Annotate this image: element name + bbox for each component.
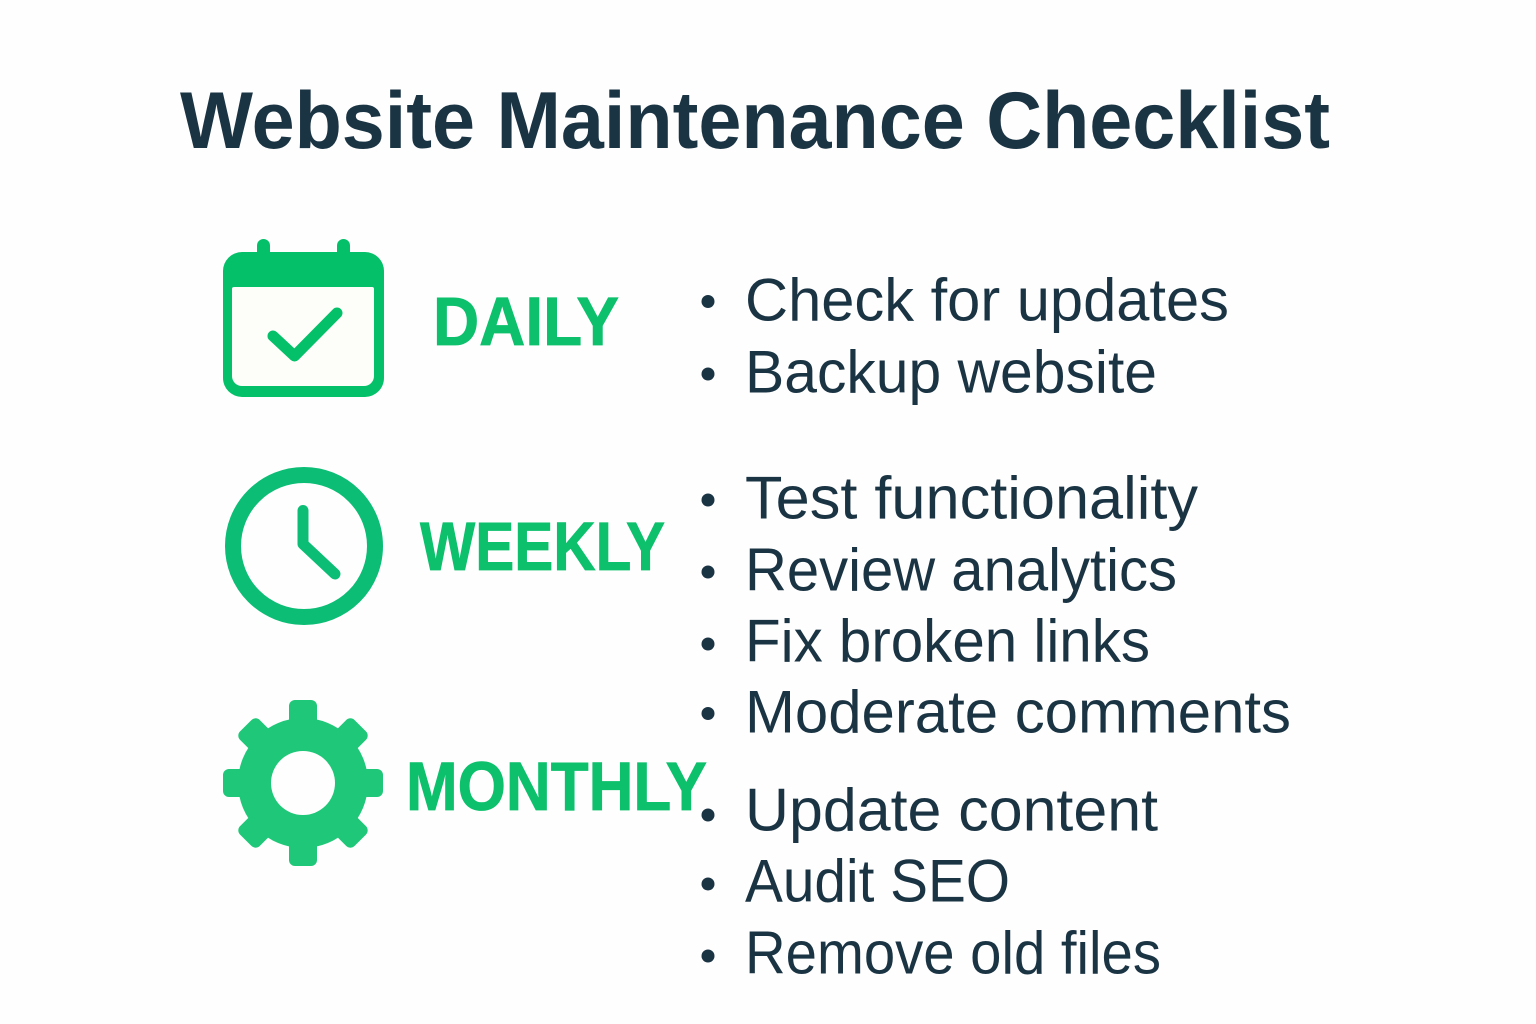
panel: monthly: [223, 700, 1161, 986]
list: monthly tasks: [702, 776, 1161, 986]
list: monthly tasks: Update content: [745, 776, 1158, 844]
title: Website Maintenance Checklist: [180, 76, 1330, 166]
heading: weekly: WEEKLY: [420, 508, 665, 585]
heading: monthly: MONTHLY: [406, 748, 707, 825]
panel: daily: [223, 239, 1229, 406]
heading: daily: DAILY: [433, 283, 619, 360]
icon: clock: [233, 475, 375, 617]
list: weekly tasks: Fix broken links: [745, 608, 1150, 674]
list: weekly tasks: [702, 464, 1291, 746]
list: monthly tasks: Audit SEO: [745, 848, 1010, 914]
icon: calendar with check: [223, 239, 384, 397]
list: daily tasks: Check for updates: [745, 266, 1229, 334]
list: daily tasks: [702, 266, 1229, 406]
list: weekly tasks: Review analytics: [745, 536, 1177, 604]
list: daily tasks: Backup website: [745, 338, 1157, 406]
list: weekly tasks: Moderate comments: [745, 678, 1291, 746]
list: monthly tasks: Remove old files: [745, 920, 1161, 986]
panel: weekly: [233, 464, 1291, 746]
icon: gear: [223, 700, 383, 866]
list: weekly tasks: Test functionality: [745, 464, 1198, 532]
